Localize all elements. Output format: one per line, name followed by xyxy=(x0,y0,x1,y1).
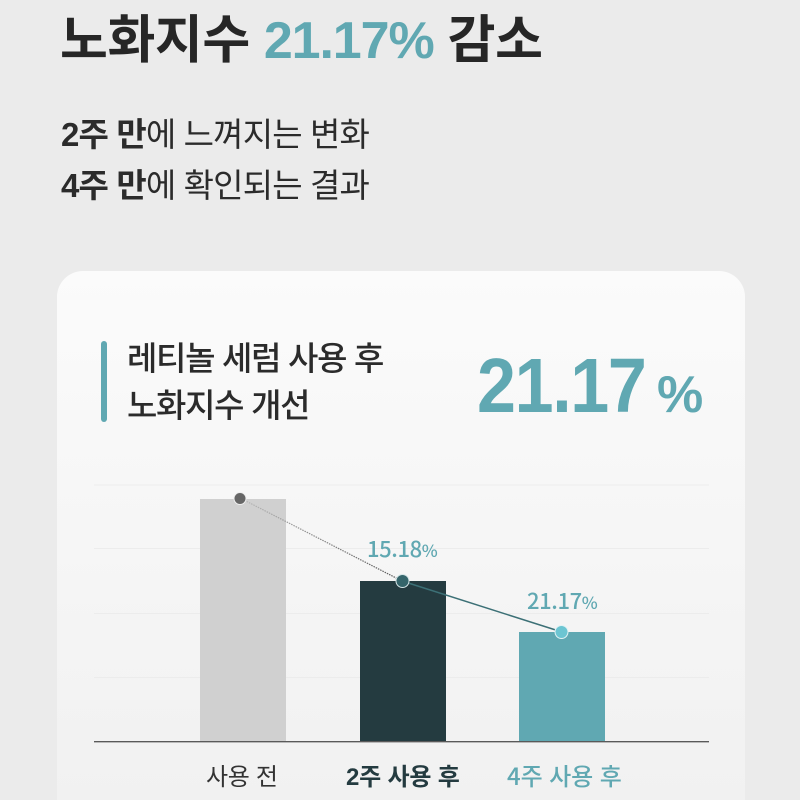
card heading: 노화지수 개선 xyxy=(127,387,309,424)
dotted trend line xyxy=(240,498,402,581)
axis label: before use: 사용 전 xyxy=(206,764,278,791)
value label: 15.18%: 15.18% xyxy=(367,532,438,564)
panel: result card xyxy=(57,271,745,800)
bar: after 2 weeks xyxy=(360,581,446,741)
subtitle text block: 4주 만에 확인되는 결과 xyxy=(61,167,370,204)
point: after 4 weeks xyxy=(555,626,568,638)
big percentage: % xyxy=(657,366,703,424)
axis line xyxy=(94,741,709,743)
bar: after 4 weeks xyxy=(519,632,605,741)
solid trend line xyxy=(402,581,562,632)
subtitle text block: 2주 만에 느껴지는 변화 xyxy=(61,116,370,153)
point: after 2 weeks xyxy=(396,574,409,588)
card heading: 레티놀 세럼 사용 후 xyxy=(127,340,383,377)
big percentage: 21.17 xyxy=(477,342,646,429)
axis label: after 4 weeks: 4주 사용 후 xyxy=(507,757,622,792)
bar chart xyxy=(94,485,709,792)
title: 노화지수 21.17% 감소 xyxy=(60,12,543,70)
axis label: after 2 weeks: 2주 사용 후 xyxy=(346,764,460,791)
point: before use xyxy=(234,492,246,504)
accent bar xyxy=(101,341,107,422)
bar: before use xyxy=(200,499,286,741)
subtitle text block xyxy=(61,116,370,204)
value label: 21.17%: 21.17% xyxy=(527,584,598,616)
card heading xyxy=(127,340,383,424)
